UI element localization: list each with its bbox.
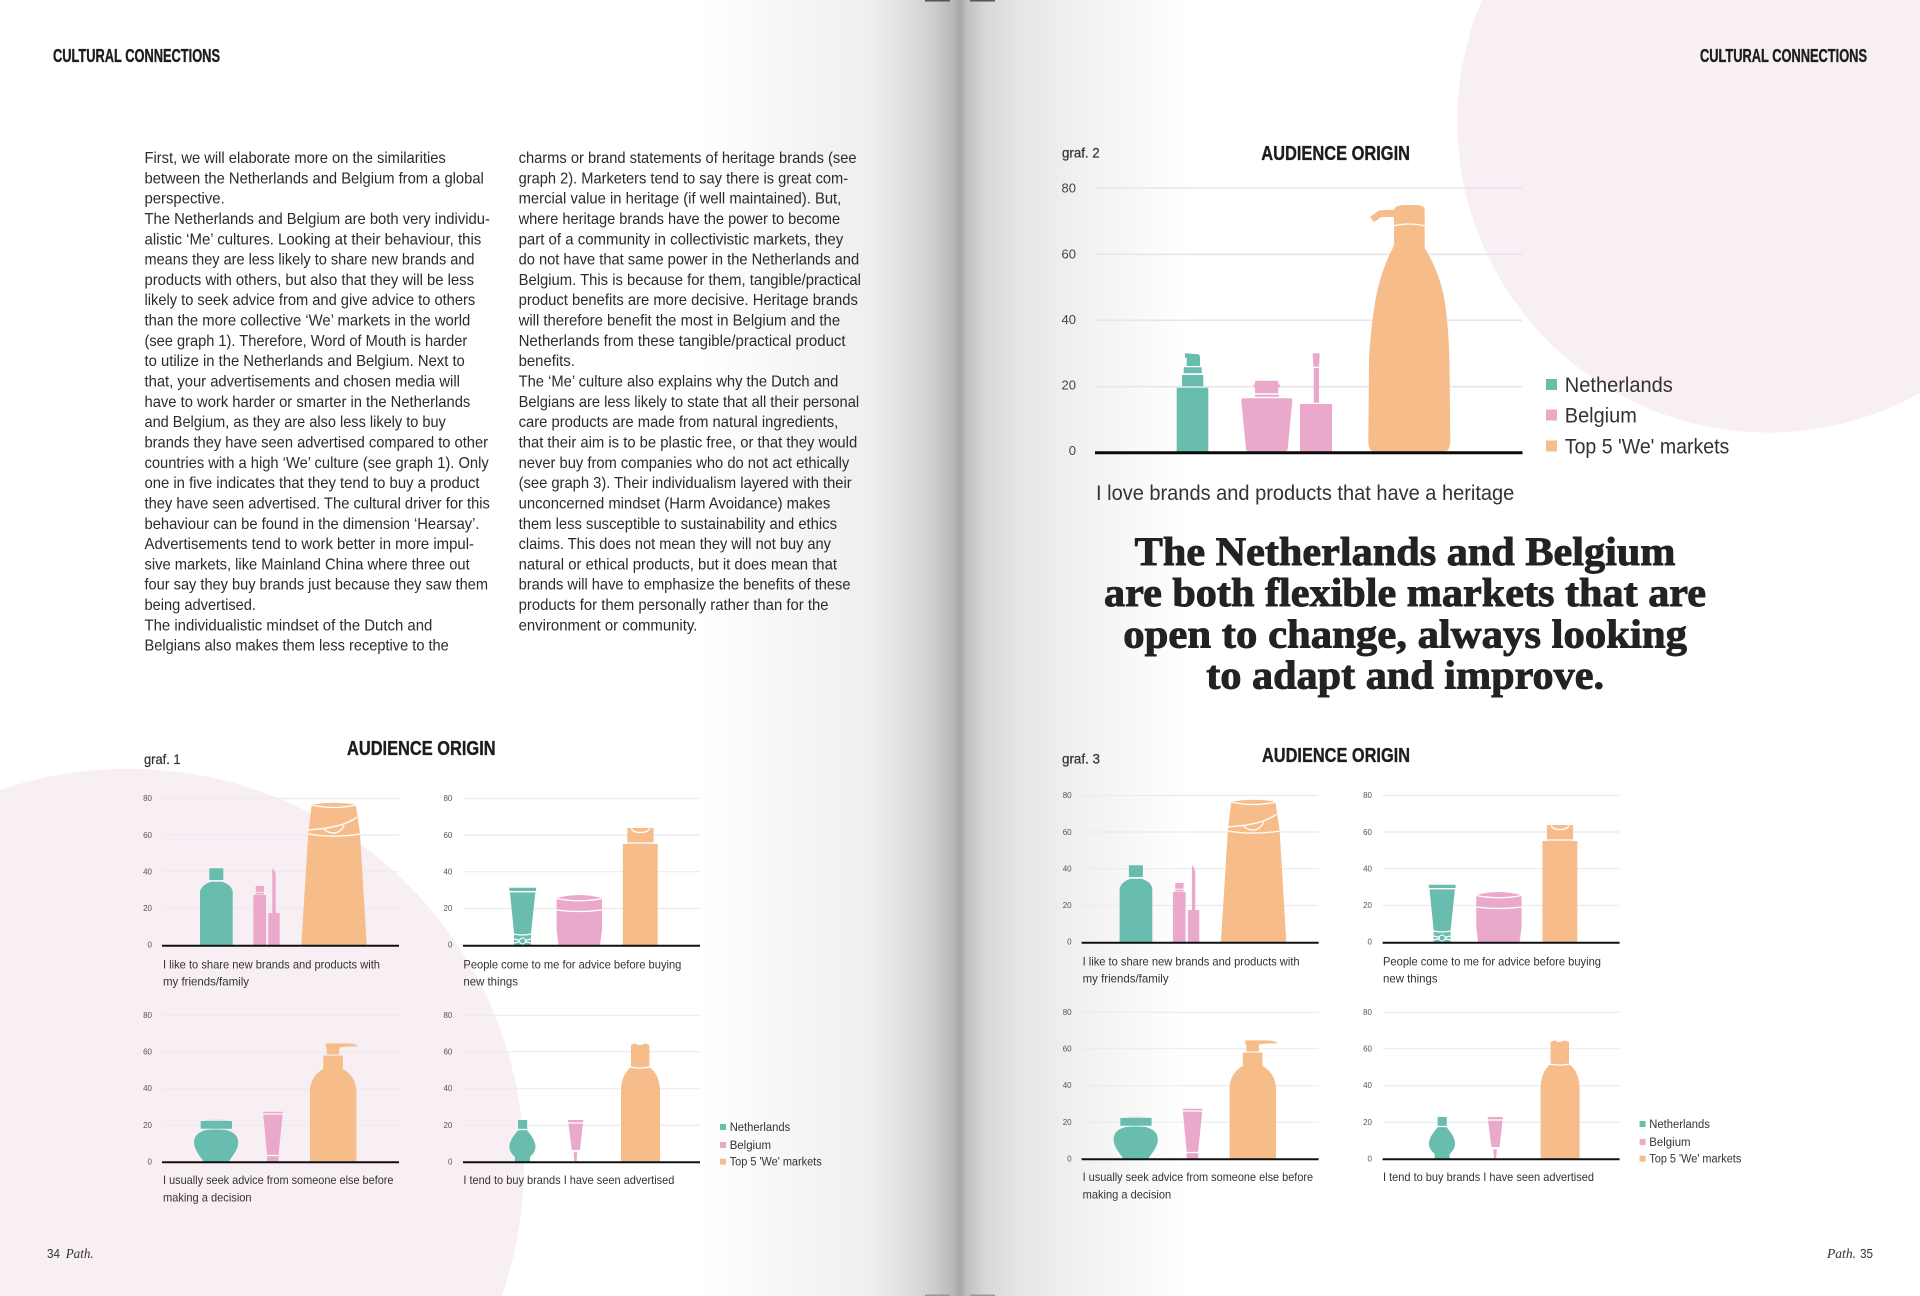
chart: people come to me (graf. 3): 20 (1363, 901, 1373, 910)
body text column 1: likely to seek advice from and give advice to others (144, 292, 475, 309)
body text column 2 (518, 150, 861, 634)
body text column 1: perspective. (144, 191, 225, 208)
graf. 2 chart: heritage: 60 (1062, 246, 1076, 262)
icon: pink tube (1183, 1109, 1203, 1159)
chart: share new brands: my friends/family (163, 975, 249, 989)
body text column 2: natural or ethical products, but it does mean that (519, 556, 838, 573)
body text column 1: have to work harder or smarter in the Netherlands (144, 394, 470, 411)
legend graf. 2 (1546, 374, 1729, 458)
body text column 2: that their aim is to be plastic free, or that they would (519, 434, 857, 452)
graf. 2 chart: heritage: 80 (1062, 180, 1076, 196)
body text column 1 (144, 150, 490, 655)
legend graf. 1 (720, 1122, 822, 1169)
chart: share new brands: 0 (148, 940, 153, 950)
chart: people come to me (graf. 3): 80 (1363, 791, 1373, 800)
legend graf. 2: Netherlands (1565, 374, 1673, 397)
legend graf. 3: Netherlands (1649, 1119, 1710, 1131)
chart: advertised brands: 80 (443, 1011, 453, 1020)
graf. 2 chart: heritage: 20 (1062, 378, 1076, 392)
body text column 2: unconcerned mindset (Harm Avoidance) makes (519, 495, 830, 512)
icon: orange tall bottle (1541, 1040, 1580, 1159)
body text column 2: graph 2). Marketers tend to say there is great com- (519, 170, 848, 187)
body text column 2: environment or community. (519, 617, 697, 634)
running header left: CULTURAL CONNECTIONS (53, 46, 220, 66)
body text column 2: them less susceptible to sustainability and ethics (519, 516, 837, 533)
graf. 1 label: graf. 1 (144, 751, 181, 767)
chart: seek advice: 0 (148, 1158, 153, 1166)
body text column 1: First, we will elaborate more on the similarities (144, 150, 446, 167)
body text column 1: being advertised. (144, 597, 256, 614)
chart: seek advice (143, 1011, 399, 1204)
crop marks top of gutter (925, 0, 995, 2)
body text column 2: where heritage brands have the power to become (518, 211, 840, 228)
legend graf. 1: Belgium (730, 1140, 771, 1152)
body text column 2: Belgium. This is because for them, tangible/practical (519, 272, 861, 289)
pull quote: The Netherlands and Belgium (1135, 529, 1676, 574)
graf. 1 heading: AUDIENCE ORIGIN (347, 738, 496, 760)
chart: people come to me (graf. 3): 40 (1363, 864, 1373, 874)
body text column 1: between the Netherlands and Belgium from a global (144, 170, 484, 187)
icon: pink jar (557, 895, 602, 945)
body text column 1: alistic ‘Me’ cultures. Looking at their behaviour, this (144, 231, 481, 248)
legend graf. 3: Top 5 'We' markets (1649, 1154, 1742, 1166)
chart: advertised brands (graf. 3): 40 (1363, 1081, 1373, 1090)
graf. 2 chart: heritage (1062, 180, 1729, 505)
chart: seek advice (graf. 3): 80 (1063, 1008, 1072, 1017)
folio right (1826, 1246, 1873, 1262)
icon: orange tall bottle (621, 1043, 660, 1162)
icon: pink mascara (253, 868, 280, 945)
body text column 1: countries with a high ‘We’ culture (see graph 1). Only (144, 455, 489, 472)
icon: teal flask (509, 1120, 536, 1162)
icon: pink thin tube (1488, 1117, 1503, 1159)
graf. 2 label: graf. 2 (1062, 144, 1100, 160)
body text column 2: products for them personally rather than for the (519, 597, 829, 614)
chart: advertised brands: 20 (443, 1121, 453, 1130)
icon: teal tube (509, 888, 536, 945)
chart: seek advice (graf. 3): 60 (1063, 1044, 1072, 1054)
icon: orange pump bottle (1368, 205, 1450, 452)
chart: seek advice (graf. 3): making a decision (1083, 1187, 1171, 1201)
folio left: Path. (65, 1247, 94, 1262)
legend graf. 2: Belgium (1565, 404, 1637, 428)
chart: advertised brands: 40 (443, 1084, 453, 1093)
chart: advertised brands: 60 (443, 1048, 453, 1056)
icon: pink thin tube (568, 1120, 583, 1162)
body text column 1: and Belgium, as they are also less likely to buy (144, 414, 446, 431)
caption: I love brands and products that have a heritage (1096, 482, 1514, 505)
chart: advertised brands (graf. 3) (1363, 1008, 1620, 1184)
body text column 2: mercial value in heritage (if well maintained). But, (519, 191, 841, 208)
folio left: 34 (47, 1246, 60, 1261)
body text column 2: (see graph 3). Their individualism layered with their (519, 475, 852, 492)
icon: teal tube (1429, 885, 1456, 942)
icon: teal flask (1429, 1117, 1455, 1159)
body text column 2: care products are made from natural ingredients, (519, 414, 838, 431)
chart: people come to me: 80 (443, 794, 453, 803)
body text column 2: The ‘Me’ culture also explains why the Dutch and (519, 374, 838, 390)
pink circle left page (0, 769, 524, 1296)
chart: share new brands (graf. 3): I like to share new brands and products with (1083, 954, 1300, 968)
icon: orange pump (1230, 1040, 1278, 1159)
chart: share new brands (graf. 3) (1063, 791, 1319, 986)
chart: advertised brands (graf. 3): 20 (1363, 1118, 1373, 1127)
chart: people come to me (graf. 3): 0 (1368, 938, 1373, 946)
chart: advertised brands (graf. 3): 60 (1363, 1044, 1373, 1054)
chart: people come to me: new things (463, 975, 518, 989)
body text column 1: to utilize in the Netherlands and Belgium. Next to (144, 353, 465, 370)
chart: share new brands (graf. 3): 20 (1063, 901, 1072, 910)
body text column 2: will therefore benefit the most in Belgium and the (518, 313, 840, 330)
body text column 1: sive markets, like Mainland China where three out (144, 556, 470, 573)
chart: share new brands: 20 (143, 904, 153, 913)
folio left (47, 1246, 94, 1262)
crop marks bottom of gutter (925, 1294, 995, 1296)
folio right: 35 (1860, 1246, 1873, 1261)
folio right: Path. (1826, 1247, 1856, 1262)
chart: share new brands (graf. 3): 60 (1063, 828, 1072, 837)
chart: people come to me: 60 (443, 831, 453, 840)
chart: seek advice (graf. 3): 0 (1067, 1154, 1072, 1164)
chart: seek advice: 60 (143, 1048, 153, 1056)
graf. 3 heading: AUDIENCE ORIGIN (1262, 745, 1410, 767)
chart: seek advice (graf. 3): 20 (1063, 1118, 1072, 1127)
chart: share new brands (graf. 3): 40 (1063, 864, 1072, 874)
body text column 2: part of a community in collectivistic markets, they (519, 231, 843, 248)
chart: share new brands (graf. 3): my friends/family (1083, 972, 1169, 986)
chart: seek advice (graf. 3) (1063, 1008, 1319, 1201)
chart: share new brands (graf. 3): 0 (1067, 938, 1072, 946)
body text column 1: they have seen advertised. The cultural driver for this (144, 495, 490, 512)
graf. 3 chart group (1063, 791, 1742, 1201)
icon: pink jar (1476, 892, 1522, 942)
chart: share new brands: 40 (143, 868, 153, 876)
body text column 1: (see graph 1). Therefore, Word of Mouth is harder (144, 333, 468, 350)
graf. 2 chart: heritage: 40 (1062, 312, 1076, 327)
pull quote: open to change, always looking (1123, 611, 1687, 656)
body text column 2: Netherlands from these tangible/practical product (519, 333, 846, 350)
body text column 1: Advertisements tend to work better in more impul- (144, 536, 474, 553)
graf. 2 chart: heritage: 0 (1069, 443, 1076, 458)
icon: orange tube (1221, 800, 1286, 942)
book gutter shadow (700, 0, 1200, 1296)
body text column 1: than the more collective ‘We’ markets in the world (144, 313, 470, 330)
body text column 1: products with others, but also that they will be less (144, 272, 474, 289)
body text column 2: never buy from companies who do not act ethically (519, 455, 849, 472)
graf. 1 chart group (143, 794, 822, 1204)
body text column 2: charms or brand statements of heritage brands (see (519, 150, 857, 167)
pull quote: to adapt and improve. (1206, 652, 1604, 697)
chart: people come to me: People come to me for advice before buying (463, 957, 681, 971)
icon: orange bottle (623, 828, 658, 945)
icon: pink tube (263, 1112, 283, 1162)
body text column 1: one in five indicates that they tend to buy a product (144, 475, 480, 492)
chart: advertised brands (graf. 3): I tend to buy brands I have seen advertised (1383, 1170, 1594, 1184)
pull quote (1104, 529, 1706, 697)
chart: seek advice: I usually seek advice from someone else before (163, 1173, 394, 1187)
legend graf. 1: Netherlands (730, 1122, 791, 1134)
body text column 2: brands will have to emphasize the benefits of these (519, 577, 851, 594)
chart: advertised brands (graf. 3): 80 (1363, 1008, 1373, 1017)
chart: seek advice: 80 (143, 1011, 153, 1020)
icon: pink nail polish bottle (1241, 381, 1292, 452)
body text column 2: product benefits are more decisive. Heritage brands (519, 292, 858, 309)
icon: teal jar (1114, 1116, 1158, 1159)
chart: people come to me (graf. 3): new things (1383, 972, 1438, 986)
body text column 1: behaviour can be found in the dimension ‘Hearsay’. (144, 516, 480, 533)
body text column 2: do not have that same power in the Netherlands and (519, 252, 859, 269)
body text column 1: The individualistic mindset of the Dutch and (144, 617, 432, 634)
chart: advertised brands (443, 1011, 700, 1187)
body text column 1: that, your advertisements and chosen media will (144, 374, 460, 390)
icon: orange bottle (1542, 825, 1577, 942)
body text column 1: The Netherlands and Belgium are both very individu- (144, 211, 490, 228)
graf. 3 label: graf. 3 (1062, 750, 1100, 766)
body text column 2: claims. This does not mean they will not buy any (519, 536, 831, 553)
chart: people come to me (graf. 3) (1363, 791, 1620, 986)
icon: orange tube (301, 803, 367, 945)
chart: seek advice: 40 (143, 1084, 153, 1093)
chart: seek advice (graf. 3): 40 (1063, 1081, 1072, 1090)
pull quote: are both flexible markets that are (1104, 570, 1706, 615)
chart: share new brands: 60 (143, 831, 153, 840)
legend graf. 1: Top 5 'We' markets (730, 1157, 822, 1169)
body text column 1: four say they buy brands just because they saw them (144, 577, 488, 594)
body text column 1: means they are less likely to share new brands and (144, 252, 474, 269)
chart: people come to me: 20 (443, 904, 453, 913)
icon: orange pump (310, 1043, 358, 1162)
graf. 2 heading: AUDIENCE ORIGIN (1261, 143, 1410, 165)
pink circle right page (1457, 0, 1920, 433)
chart: advertised brands: I tend to buy brands I have seen advertised (463, 1173, 674, 1187)
chart: share new brands: I like to share new brands and products with (163, 957, 380, 971)
chart: seek advice (graf. 3): I usually seek advice from someone else before (1083, 1170, 1313, 1184)
icon: teal bottle (200, 868, 233, 945)
chart: people come to me (graf. 3): People come to me for advice before buying (1383, 954, 1601, 968)
chart: advertised brands (graf. 3): 0 (1368, 1154, 1373, 1164)
body text column 2: Belgians are less likely to state that all their personal (519, 394, 859, 411)
chart: people come to me (graf. 3): 60 (1363, 828, 1373, 837)
icon: teal jar (194, 1119, 238, 1162)
icon: pink mascara (1173, 865, 1199, 942)
icon: pink wand and base (1300, 353, 1332, 452)
chart: advertised brands: 0 (448, 1158, 453, 1166)
chart: people come to me: 0 (448, 940, 453, 950)
legend graf. 3: Belgium (1649, 1137, 1691, 1149)
chart: seek advice: making a decision (163, 1190, 252, 1204)
chart: seek advice: 20 (143, 1121, 153, 1130)
legend graf. 2: Top 5 'We' markets (1565, 436, 1729, 458)
chart: people come to me: 40 (443, 868, 453, 876)
chart: people come to me (443, 794, 700, 989)
body text column 2: benefits. (519, 353, 575, 370)
icon: teal pump bottle (1177, 353, 1208, 452)
body text column 1: Belgians also makes them less receptive to the (144, 638, 449, 655)
chart: share new brands (graf. 3): 80 (1063, 791, 1072, 800)
body text column 1: brands they have seen advertised compared to other (144, 434, 489, 452)
legend graf. 3 (1640, 1119, 1742, 1166)
icon: teal bottle (1120, 865, 1152, 942)
chart: share new brands (143, 794, 399, 989)
chart: share new brands: 80 (143, 794, 153, 803)
